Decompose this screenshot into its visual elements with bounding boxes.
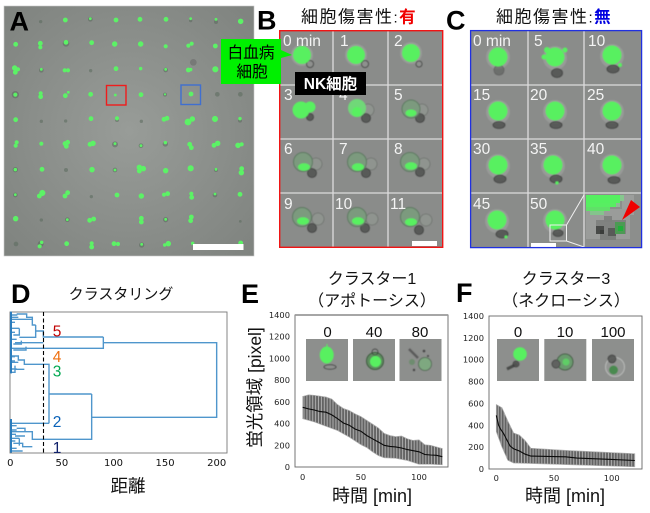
cell images C (485, 44, 624, 238)
red arrowhead (622, 200, 640, 220)
frame times B: 7 (339, 141, 348, 158)
frame times C: 10 (588, 33, 606, 50)
panel label D: D (11, 279, 30, 309)
y ticks F: 1400 (463, 311, 484, 321)
inset images E (306, 324, 442, 381)
y axis label E: 蛍光領域 [pixel] (245, 327, 265, 448)
inset images E: 80 (412, 324, 428, 341)
frame times B: 8 (394, 141, 403, 158)
scale bar B (412, 241, 437, 246)
y ticks E (269, 310, 290, 472)
frame times C (473, 33, 606, 213)
heading E: （アポトーシス） (308, 292, 436, 310)
heading E: クラスター1 (328, 270, 416, 288)
frame times C: 0 min (473, 33, 511, 50)
y ticks F: 400 (468, 420, 484, 430)
inset images F (497, 324, 634, 381)
frame times C: 5 (534, 33, 543, 50)
x ticks F: 100 (604, 473, 620, 483)
frame times C: 35 (530, 141, 547, 158)
error band E (303, 395, 442, 465)
heading B: cytotoxicity yes: 細胞傷害性:有 (301, 8, 417, 26)
x ticks E (300, 472, 427, 482)
panel label C: C (446, 6, 466, 36)
frame times C: 50 (530, 196, 548, 213)
y ticks E: 200 (274, 440, 290, 450)
frame times B: 3 (284, 87, 293, 104)
inset images F: 100 (600, 324, 626, 341)
frame times B: 11 (390, 196, 406, 213)
cluster numbers: 2 (53, 414, 61, 431)
panel A: microwell overview (4, 6, 254, 256)
frame times B: 0 min (283, 33, 321, 50)
frame times C: 40 (587, 141, 605, 158)
y ticks F: 800 (468, 377, 484, 387)
blue selection box (181, 85, 200, 104)
chart E: fluorescent area over time (269, 310, 448, 482)
panel label A: A (10, 6, 29, 36)
y ticks E: 600 (274, 397, 290, 407)
frame times B: 6 (284, 141, 293, 158)
x axis ticks D: 200 (207, 458, 226, 469)
panel B: time-lapse with cytotoxicity (279, 30, 443, 248)
x axis ticks D: 0 (7, 458, 13, 469)
inset images F: 10 (557, 324, 573, 341)
frame times C: 45 (473, 196, 490, 213)
heading F: クラスター3 (522, 270, 610, 288)
inset images F: 0 (514, 324, 522, 341)
mean curve F (496, 415, 635, 460)
mean curve E (303, 407, 442, 457)
x axis label D: 距離 (110, 476, 146, 496)
heading F: （ネクローシス） (502, 292, 630, 310)
error band F (496, 404, 635, 467)
frame times C: 20 (530, 87, 548, 104)
cell images B (291, 42, 432, 234)
x ticks E: 0 (300, 472, 305, 482)
heading D: クラスタリング (69, 286, 173, 303)
frame times C: 30 (473, 141, 491, 158)
frame times C: 25 (587, 87, 604, 104)
y ticks E: 1400 (269, 310, 290, 320)
y ticks F: 1000 (463, 355, 484, 365)
cluster numbers (53, 324, 62, 457)
scale bar (193, 244, 244, 250)
y ticks E: 800 (274, 375, 290, 385)
panel C: time-lapse without cytotoxicity (470, 30, 642, 248)
dendrogram branches (11, 314, 217, 451)
magnified inset (585, 194, 641, 247)
frame times B: 9 (284, 196, 293, 213)
x axis label F: 時間 [min] (525, 486, 605, 506)
frame times B (283, 33, 406, 213)
heading F (502, 270, 630, 310)
cut threshold dashed line (42, 312, 44, 453)
x ticks F: 50 (549, 473, 559, 483)
leaf cluster marks (8, 312, 14, 453)
callout: leukemia cell: 細胞 (236, 63, 268, 81)
frame times B: 10 (335, 196, 353, 213)
scale bar C (531, 243, 556, 248)
x ticks F (494, 473, 620, 483)
x axis ticks D: 100 (104, 458, 123, 469)
cluster numbers: 5 (53, 324, 61, 340)
frame times B: 5 (394, 87, 403, 104)
y ticks E: 0 (285, 462, 290, 472)
frame times B: 2 (394, 33, 403, 50)
chart F: fluorescent area over time (463, 311, 642, 483)
x ticks F: 0 (494, 473, 499, 483)
y ticks E: 400 (274, 419, 290, 429)
green fluorescent leukemia cells in wells (12, 17, 244, 249)
zoom box and lines (550, 195, 584, 247)
callout: NK cell: NK細胞 (304, 75, 358, 93)
x axis label E: 時間 [min] (332, 486, 412, 506)
frame times B: 4 (339, 87, 348, 104)
panel label B: B (257, 6, 276, 36)
dendrogram (7, 312, 227, 469)
inset images E: 0 (323, 324, 332, 341)
inset images E: 40 (366, 324, 382, 341)
y ticks F: 0 (479, 464, 484, 474)
panel label E: E (241, 279, 259, 309)
frame times B: 1 (340, 33, 349, 50)
heading C: cytotoxicity no: 細胞傷害性:無 (496, 8, 612, 26)
y ticks E: 1200 (269, 332, 290, 342)
callout: NK cell (295, 72, 366, 95)
cluster numbers: 1 (53, 440, 61, 457)
frame times C: 15 (473, 87, 490, 104)
y ticks F: 600 (468, 398, 484, 408)
x ticks E: 100 (411, 472, 427, 482)
y ticks F: 1200 (463, 333, 484, 343)
heading E (308, 270, 436, 310)
y ticks F: 200 (468, 442, 484, 452)
callout: leukemia cell (221, 39, 292, 84)
panel label F: F (456, 278, 472, 308)
x axis ticks D: 150 (156, 458, 175, 469)
y ticks F (463, 311, 484, 474)
red selection box (106, 86, 126, 105)
callout: leukemia cell: 白血病 (227, 44, 275, 62)
x ticks E: 50 (356, 472, 366, 482)
cluster numbers: 3 (53, 364, 61, 380)
cluster numbers: 4 (53, 349, 62, 366)
x axis ticks D (7, 458, 226, 469)
x axis ticks D: 50 (56, 458, 68, 469)
y ticks E: 1000 (269, 353, 290, 363)
